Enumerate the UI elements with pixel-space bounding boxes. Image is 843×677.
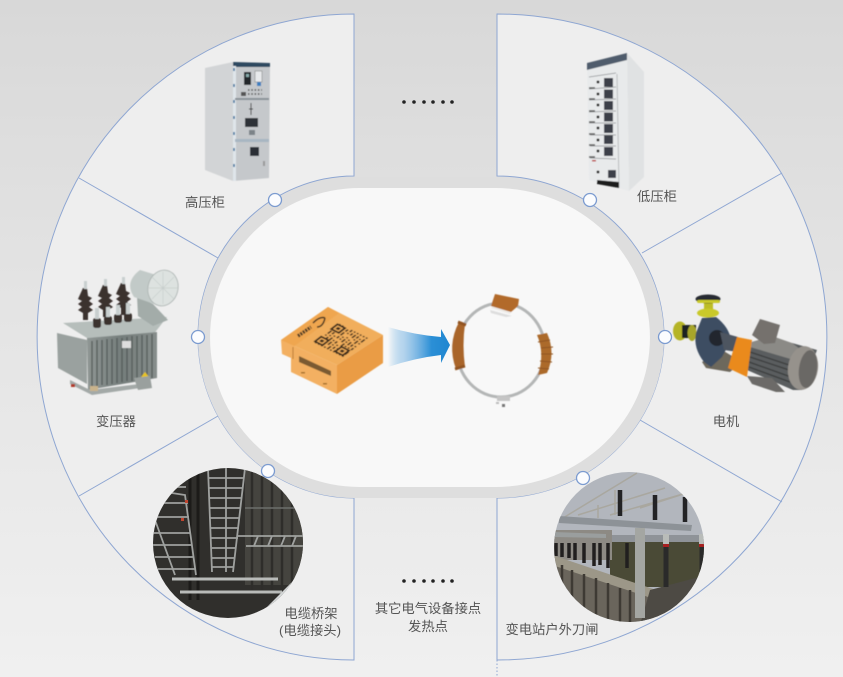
panel: right sectors xyxy=(497,14,827,677)
text: low-voltage cabinet label: 低压柜 xyxy=(637,189,677,204)
text: substation label: 变电站户外刀闸 xyxy=(505,621,599,637)
arrow: blue arrow from sensor to ring xyxy=(388,327,450,367)
icon: top ellipsis xyxy=(402,100,454,104)
photo: outdoor substation disconnect switch xyxy=(552,470,707,625)
center ring xyxy=(198,177,664,498)
text: cable tray label: 电缆桥架 xyxy=(284,606,338,621)
panel: left sectors xyxy=(37,14,354,660)
icon: high-voltage cabinet xyxy=(205,62,270,181)
text: other contacts label xyxy=(375,600,481,634)
text: cable tray label: (电缆接头) xyxy=(279,622,341,638)
text: motor label: 电机 xyxy=(713,414,739,429)
text: high-voltage cabinet label: 高压柜 xyxy=(185,194,225,210)
icon: motor and pump xyxy=(673,294,821,392)
icon: busbar ring with sensors xyxy=(452,294,553,407)
icon: low-voltage cabinet xyxy=(587,53,644,191)
photo: cable tray xyxy=(150,465,306,621)
text: other contacts label: 发热点 xyxy=(408,619,448,634)
node markers xyxy=(192,194,672,484)
text: cable tray label xyxy=(279,606,341,638)
icon: bottom ellipsis xyxy=(402,579,454,583)
text: other contacts label: 其它电气设备接点 xyxy=(375,600,481,616)
icon: transformer xyxy=(57,267,182,395)
text: transformer label: 变压器 xyxy=(96,414,136,429)
icon: orange sensor box with QR code xyxy=(281,307,383,394)
panel: center xyxy=(210,188,650,487)
